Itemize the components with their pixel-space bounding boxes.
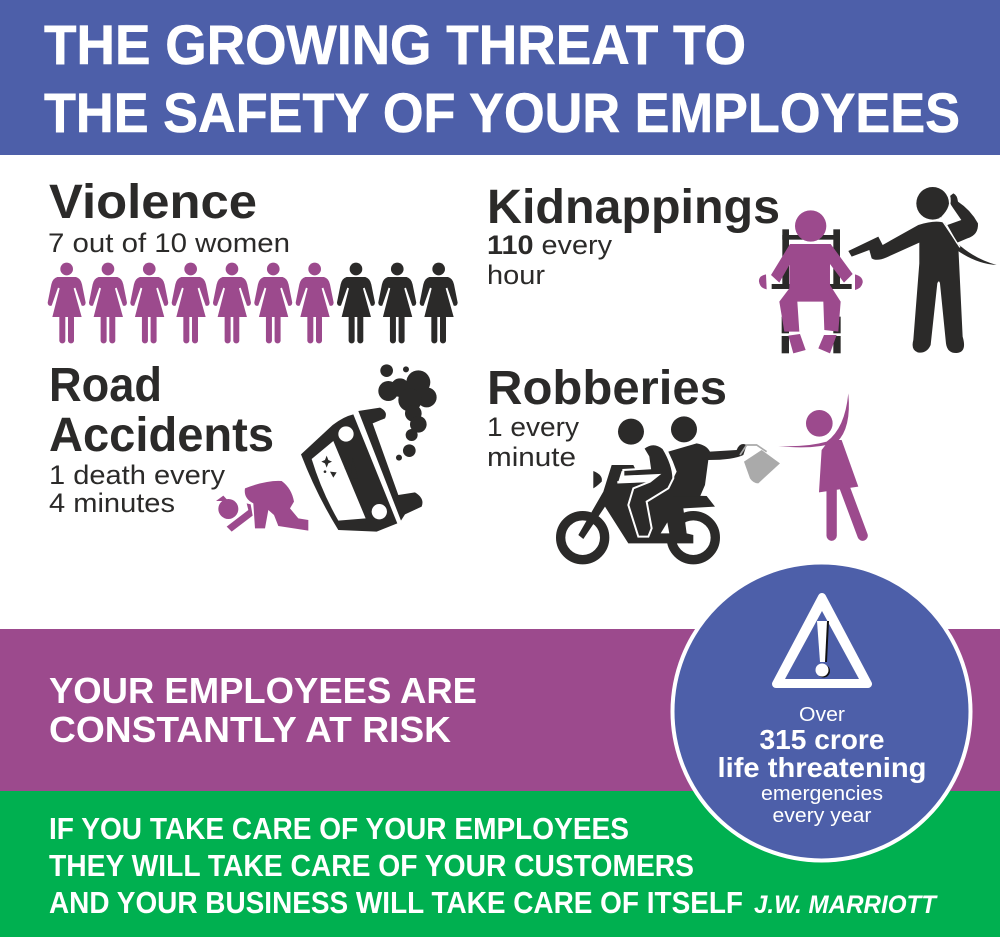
hostage figure bbox=[759, 210, 863, 353]
text: 1 every minute: minute bbox=[487, 442, 576, 472]
title banner: THE GROWING THREAT TO bbox=[44, 13, 746, 76]
panel: kidnappings bbox=[487, 181, 997, 353]
rear rider bbox=[643, 416, 747, 535]
heading: kidnappings: Kidnappings bbox=[487, 181, 780, 234]
icon row: women pictogram bbox=[48, 263, 458, 343]
heading: robberies: Robberies bbox=[487, 362, 727, 415]
injured person bbox=[216, 481, 308, 532]
panel: road accidents bbox=[49, 359, 437, 532]
text: 110 every hour: 110 every bbox=[487, 230, 613, 260]
band: constantly at risk: CONSTANTLY AT RISK bbox=[49, 709, 451, 750]
panel: violence bbox=[48, 176, 458, 343]
text: 1 death every 4 minutes: 1 death every bbox=[49, 460, 226, 490]
band: marriott quote: IF YOU TAKE CARE OF YOUR EMPLOYEES bbox=[49, 811, 629, 846]
band: constantly at risk bbox=[0, 629, 1000, 791]
icon: overturned car with injured person bbox=[216, 364, 437, 532]
band: marriott quote: J.W. MARRIOTT bbox=[754, 891, 939, 919]
callout: emergencies circle bbox=[672, 562, 970, 860]
heading: violence: Violence bbox=[49, 176, 257, 229]
text: emergency statistic: emergencies bbox=[761, 783, 883, 805]
band: marriott quote bbox=[0, 791, 1000, 937]
panel: robberies bbox=[487, 362, 863, 560]
icon: hostage in chair with gunman bbox=[759, 187, 997, 353]
band: constantly at risk: YOUR EMPLOYEES ARE bbox=[49, 670, 477, 711]
handbag bbox=[740, 445, 780, 483]
title banner bbox=[0, 0, 1000, 155]
heading: road accidents bbox=[49, 359, 274, 462]
text: 1 death every 4 minutes bbox=[49, 460, 226, 518]
text: emergency statistic: Over bbox=[799, 704, 845, 726]
text: emergency statistic: 315 crore bbox=[760, 724, 884, 755]
chair bbox=[772, 229, 852, 353]
text: 7 out of 10 women: 7 out of 10 women bbox=[48, 228, 290, 258]
gunman figure bbox=[848, 187, 997, 353]
text: emergency statistic: every year bbox=[772, 805, 872, 827]
icon: warning triangle bbox=[776, 597, 868, 684]
text: 110 every hour bbox=[487, 230, 613, 290]
band: marriott quote: THEY WILL TAKE CARE OF YOUR CUSTOMERS bbox=[49, 848, 694, 883]
front rider bbox=[617, 419, 673, 537]
text: 1 every minute: 1 every bbox=[487, 412, 580, 442]
smoke bbox=[378, 364, 437, 461]
icon: motorcycle bag snatching bbox=[561, 393, 863, 560]
victim bbox=[778, 393, 863, 536]
text: emergency statistic bbox=[718, 704, 926, 827]
text: emergency statistic: life threatening bbox=[718, 752, 926, 783]
motorcycle bbox=[561, 465, 715, 560]
heading: road accidents: Road bbox=[49, 359, 162, 412]
heading: road accidents: Accidents bbox=[49, 409, 274, 462]
text: 1 death every 4 minutes: 4 minutes bbox=[49, 488, 175, 518]
car bbox=[301, 408, 422, 532]
title banner: THE SAFETY OF YOUR EMPLOYEES bbox=[44, 81, 960, 144]
text: 110 every hour: hour bbox=[487, 260, 545, 290]
band: marriott quote: AND YOUR BUSINESS WILL TAKE CARE OF ITSELF bbox=[49, 885, 743, 920]
text: 1 every minute bbox=[487, 412, 580, 472]
